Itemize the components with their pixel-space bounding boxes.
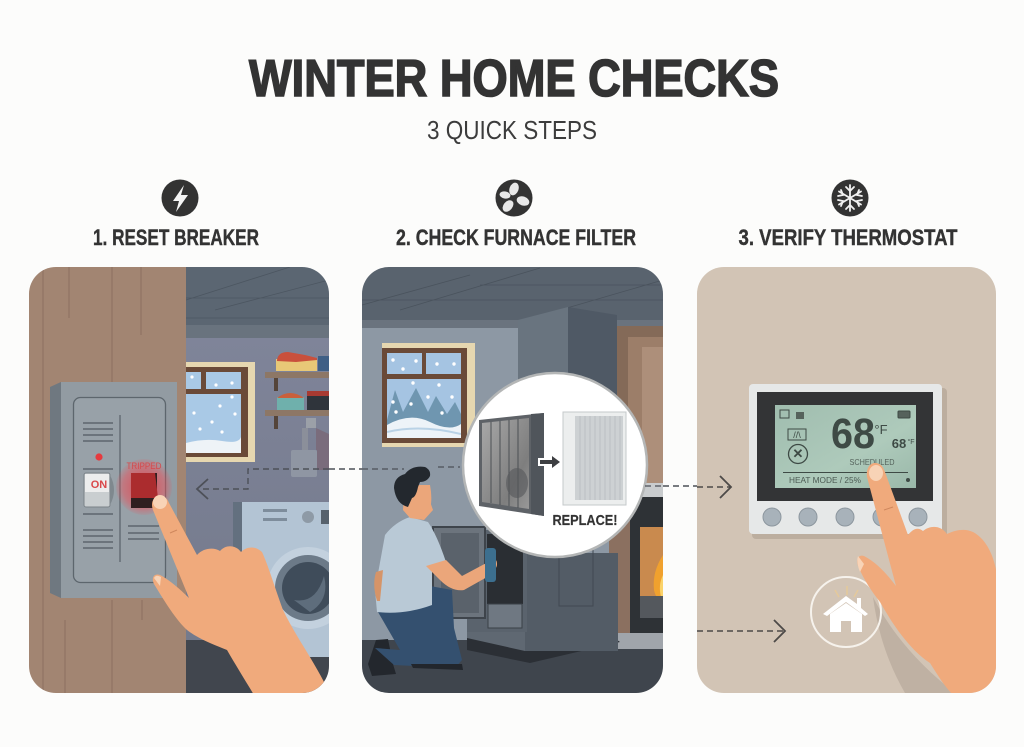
thermostat: [749, 384, 947, 539]
washing machine: [233, 502, 329, 657]
breaker panel: [50, 382, 177, 598]
shoe: [368, 639, 396, 676]
icon: snowflake: [832, 180, 868, 216]
junction box: [291, 428, 329, 477]
dashed arrow: [197, 469, 329, 499]
display: //\: [793, 430, 801, 440]
display: 68: [831, 410, 875, 458]
fireplace: [618, 483, 663, 649]
magnifier circle: [463, 373, 647, 557]
clean filter: [563, 412, 626, 505]
can: [485, 548, 496, 582]
icon: lightning bolt: [162, 180, 198, 216]
dashed arrow top: [697, 476, 731, 498]
window: [382, 343, 475, 447]
on switch: [84, 473, 114, 507]
pointing hand: [857, 463, 998, 695]
hair: [394, 467, 430, 507]
dashed line right: [645, 485, 661, 487]
dashed line: [362, 467, 460, 469]
tripped switch: TRIPPED: [126, 461, 162, 471]
wood wall: [29, 267, 186, 693]
person with filter: [368, 467, 497, 676]
shirt: [375, 517, 446, 613]
vents: [83, 423, 159, 548]
swap arrow: [538, 456, 560, 468]
panel: check furnace filter: [362, 267, 663, 693]
connector: dashed line between panels 1 and 2: [329, 468, 403, 470]
display: ✕: [793, 446, 803, 461]
room background: [186, 267, 329, 693]
display: °F: [907, 438, 915, 446]
panel: reset breaker: [29, 267, 349, 695]
heading: step 1: 1. RESET BREAKER: [93, 225, 259, 250]
heading: step 3: 3. VERIFY THERMOSTAT: [738, 225, 958, 250]
tripped switch: [116, 459, 172, 515]
trousers: [375, 586, 462, 668]
window: [186, 362, 255, 462]
display: °F: [874, 422, 888, 437]
panel: verify thermostat: [697, 267, 998, 695]
connector: dashed line between panels 2 and 3: [663, 485, 697, 487]
title: WINTER HOME CHECKS: [249, 50, 779, 108]
room background: [362, 267, 663, 693]
chimney: [518, 307, 617, 396]
dashed arrow bottom: [697, 620, 785, 642]
display: HEAT MODE / 25%: [789, 475, 861, 485]
icon: fan: [496, 180, 532, 216]
callout text: REPLACE!: [552, 512, 618, 529]
display: [775, 405, 916, 488]
arm: [426, 560, 485, 590]
indicator light: [95, 453, 103, 461]
icon: home: [811, 577, 955, 693]
display: 68: [892, 436, 906, 451]
left arm: [374, 570, 383, 601]
furnace: [433, 527, 620, 663]
buttons: [763, 508, 927, 526]
on switch: ON: [91, 479, 107, 491]
heading: step 2: 2. CHECK FURNACE FILTER: [396, 225, 636, 250]
shelves with boxes: [265, 352, 329, 429]
pointing hand: [152, 495, 324, 695]
subtitle: 3 QUICK STEPS: [427, 115, 597, 145]
wood wall: [609, 326, 663, 646]
neck and face: [403, 504, 433, 520]
display: SCHEDULED: [850, 458, 895, 467]
dirty filter: [479, 413, 544, 516]
panel background: [697, 267, 996, 693]
